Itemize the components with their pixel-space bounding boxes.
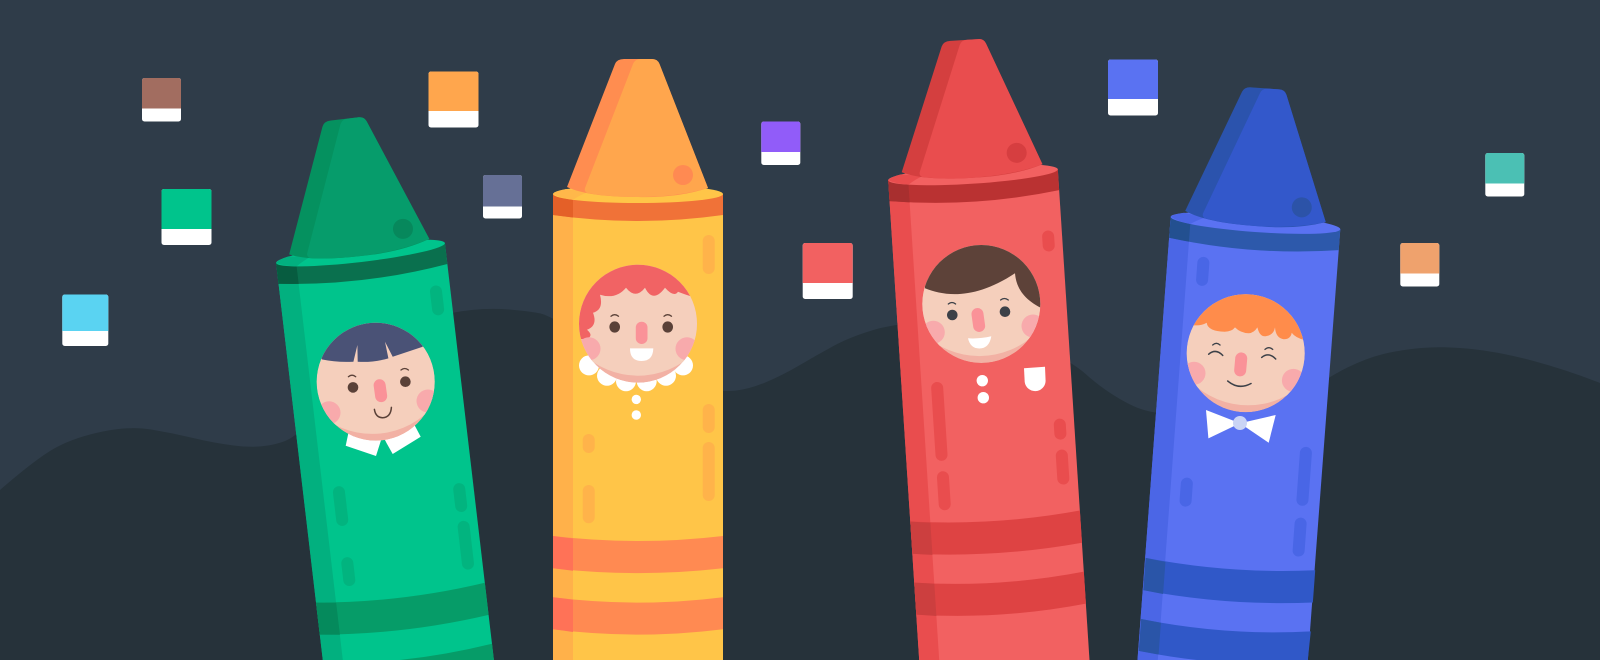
- blue crayon character: [1138, 82, 1350, 660]
- swatch: red: [803, 243, 853, 299]
- blue crayon face: [1186, 294, 1305, 443]
- swatch: slate: [483, 175, 522, 218]
- green crayon character: [260, 109, 494, 660]
- red crayon face: [922, 245, 1046, 404]
- swatch: teal: [1485, 153, 1524, 196]
- swatch: orange: [428, 72, 478, 128]
- swatch: purple: [761, 122, 800, 165]
- green crayon face: [316, 322, 435, 456]
- swatch: brown: [142, 78, 181, 122]
- red crayon character: [879, 34, 1090, 660]
- green crayon barrel: [276, 243, 494, 660]
- red crayon barrel: [888, 169, 1090, 660]
- swatch: cyan: [62, 294, 108, 346]
- red crayon band and tip: [879, 34, 1086, 620]
- yellow crayon character: [553, 59, 723, 660]
- green crayon band and tip: [260, 109, 489, 639]
- yellow crayon face: [579, 264, 697, 420]
- swatch: blue: [1108, 60, 1158, 116]
- swatch: green: [162, 189, 212, 245]
- yellow crayon body: [553, 59, 723, 660]
- blue crayon barrel: [1138, 217, 1340, 660]
- background hills: [0, 309, 1600, 660]
- blue crayon band and tip: [1143, 82, 1350, 607]
- swatch: tan: [1400, 243, 1439, 286]
